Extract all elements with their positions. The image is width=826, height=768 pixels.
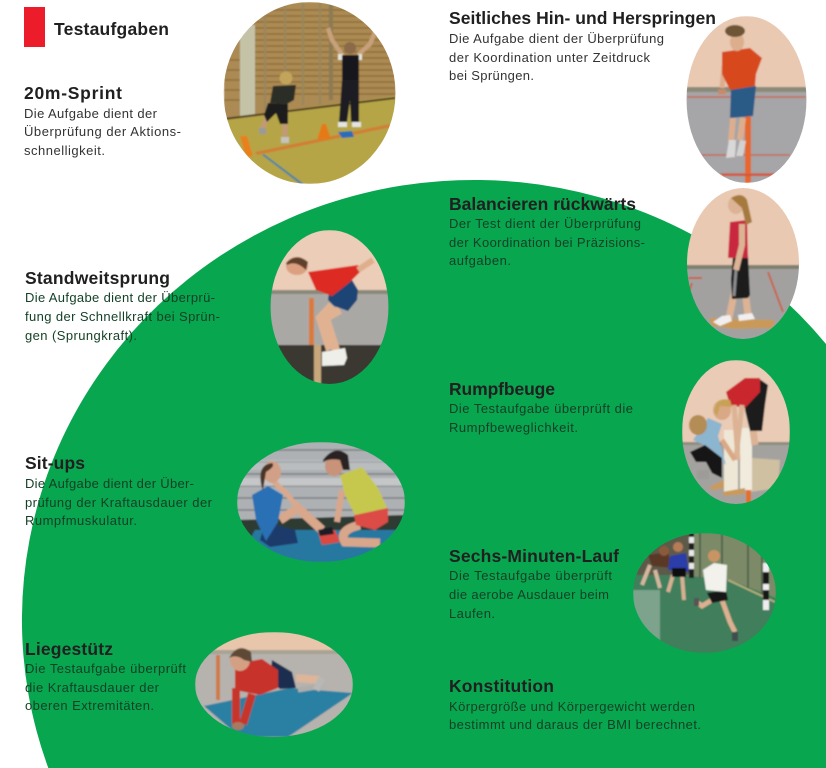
- text block: Rumpfbeuge: Rumpfbeweglichkeit.: [449, 420, 578, 435]
- standing man: [328, 28, 375, 127]
- text block: Balancieren rückwärts: der Koordination bei Präzisions-: [449, 235, 645, 250]
- text block: Balancieren rückwärts: [449, 194, 645, 268]
- text block: Standweitsprung: gen (Sprungkraft).: [25, 328, 137, 343]
- photo: Liegestütz: [195, 632, 353, 738]
- text block: Standweitsprung: Standweitsprung: [25, 268, 170, 288]
- red title marker: [24, 7, 45, 47]
- photo: Balancieren rückwärts: [686, 187, 800, 340]
- text block: Balancieren rückwärts: Balancieren rückwärts: [449, 194, 636, 214]
- heading block: 20m-Sprint: Die Aufgabe dient der: [24, 106, 158, 121]
- text block: Konstitution: Körpergröße und Körpergewicht werden: [449, 699, 695, 714]
- text block: Standweitsprung: [25, 268, 220, 343]
- text block: Sechs-Minuten-Lauf: Die Testaufgabe überprüft: [449, 568, 612, 583]
- text block: Sit-ups: [25, 453, 213, 528]
- text block: Sit-ups: Sit-ups: [25, 453, 85, 473]
- text block: Rumpfbeuge: Rumpfbeuge: [449, 379, 555, 399]
- photo: Seitliches Hin- und Herspringen: [686, 16, 807, 183]
- text block: Sit-ups: prüfung der Kraftausdauer der: [25, 495, 213, 510]
- photo: Sit-ups: [237, 442, 405, 562]
- heading block: 20m-Sprint: Überprüfung der Aktions-: [24, 124, 181, 139]
- text block: Liegestütz: [25, 639, 186, 713]
- text block: Standweitsprung: Die Aufgabe dient der Überprü-: [25, 290, 215, 305]
- green circle background: [22, 180, 826, 768]
- text block: Liegestütz: Die Testaufgabe überprüft: [25, 661, 186, 676]
- text block: Sechs-Minuten-Lauf: Sechs-Minuten-Lauf: [449, 546, 619, 566]
- text block: Seitliches Hin- und Herspringen: Die Aufgabe dient der Überprüfung: [449, 31, 664, 46]
- text block: Seitliches Hin- und Herspringen: [449, 8, 716, 83]
- text block: Konstitution: [449, 676, 701, 732]
- text block: Rumpfbeuge: [449, 379, 633, 435]
- text block: Liegestütz: Liegestütz: [25, 639, 113, 659]
- text block: Balancieren rückwärts: aufgaben.: [449, 253, 511, 268]
- text block: Liegestütz: oberen Extremitäten.: [25, 698, 154, 713]
- heading block: 20m-Sprint: 20m-Sprint: [24, 83, 122, 103]
- text block: Liegestütz: die Kraftausdauer der: [25, 680, 160, 695]
- text block: Rumpfbeuge: Die Testaufgabe überprüft die: [449, 401, 633, 416]
- photo: Rumpfbeuge: [682, 360, 790, 505]
- text block: Balancieren rückwärts: Der Test dient der Überprüfung: [449, 216, 641, 231]
- text block: Seitliches Hin- und Herspringen: bei Sprüngen.: [449, 68, 534, 83]
- photo: Sechs-Minuten-Lauf: [633, 533, 776, 653]
- runner: [259, 72, 296, 143]
- photo: 20m-Sprint: [224, 2, 396, 184]
- text block: Konstitution: bestimmt und daraus der BMI berechnet.: [449, 717, 701, 732]
- text block: Sechs-Minuten-Lauf: die aerobe Ausdauer beim: [449, 587, 609, 602]
- text block: Sit-ups: Rumpfmuskulatur.: [25, 513, 137, 528]
- text block: Standweitsprung: fung der Schnellkraft bei Sprün-: [25, 309, 220, 324]
- heading block: 20m-Sprint: [24, 83, 181, 158]
- heading block: 20m-Sprint: schnelligkeit.: [24, 143, 105, 158]
- title: Testaufgaben: [54, 19, 169, 39]
- text block: Sechs-Minuten-Lauf: Laufen.: [449, 606, 495, 621]
- text block: Sit-ups: Die Aufgabe dient der Über-: [25, 476, 194, 491]
- text block: Konstitution: Konstitution: [449, 676, 554, 696]
- text block: Sechs-Minuten-Lauf: [449, 546, 619, 621]
- photo: Standweitsprung: [270, 230, 389, 385]
- text block: Seitliches Hin- und Herspringen: Seitliches Hin- und Herspringen: [449, 8, 716, 28]
- text block: Seitliches Hin- und Herspringen: der Koordination unter Zeitdruck: [449, 50, 650, 65]
